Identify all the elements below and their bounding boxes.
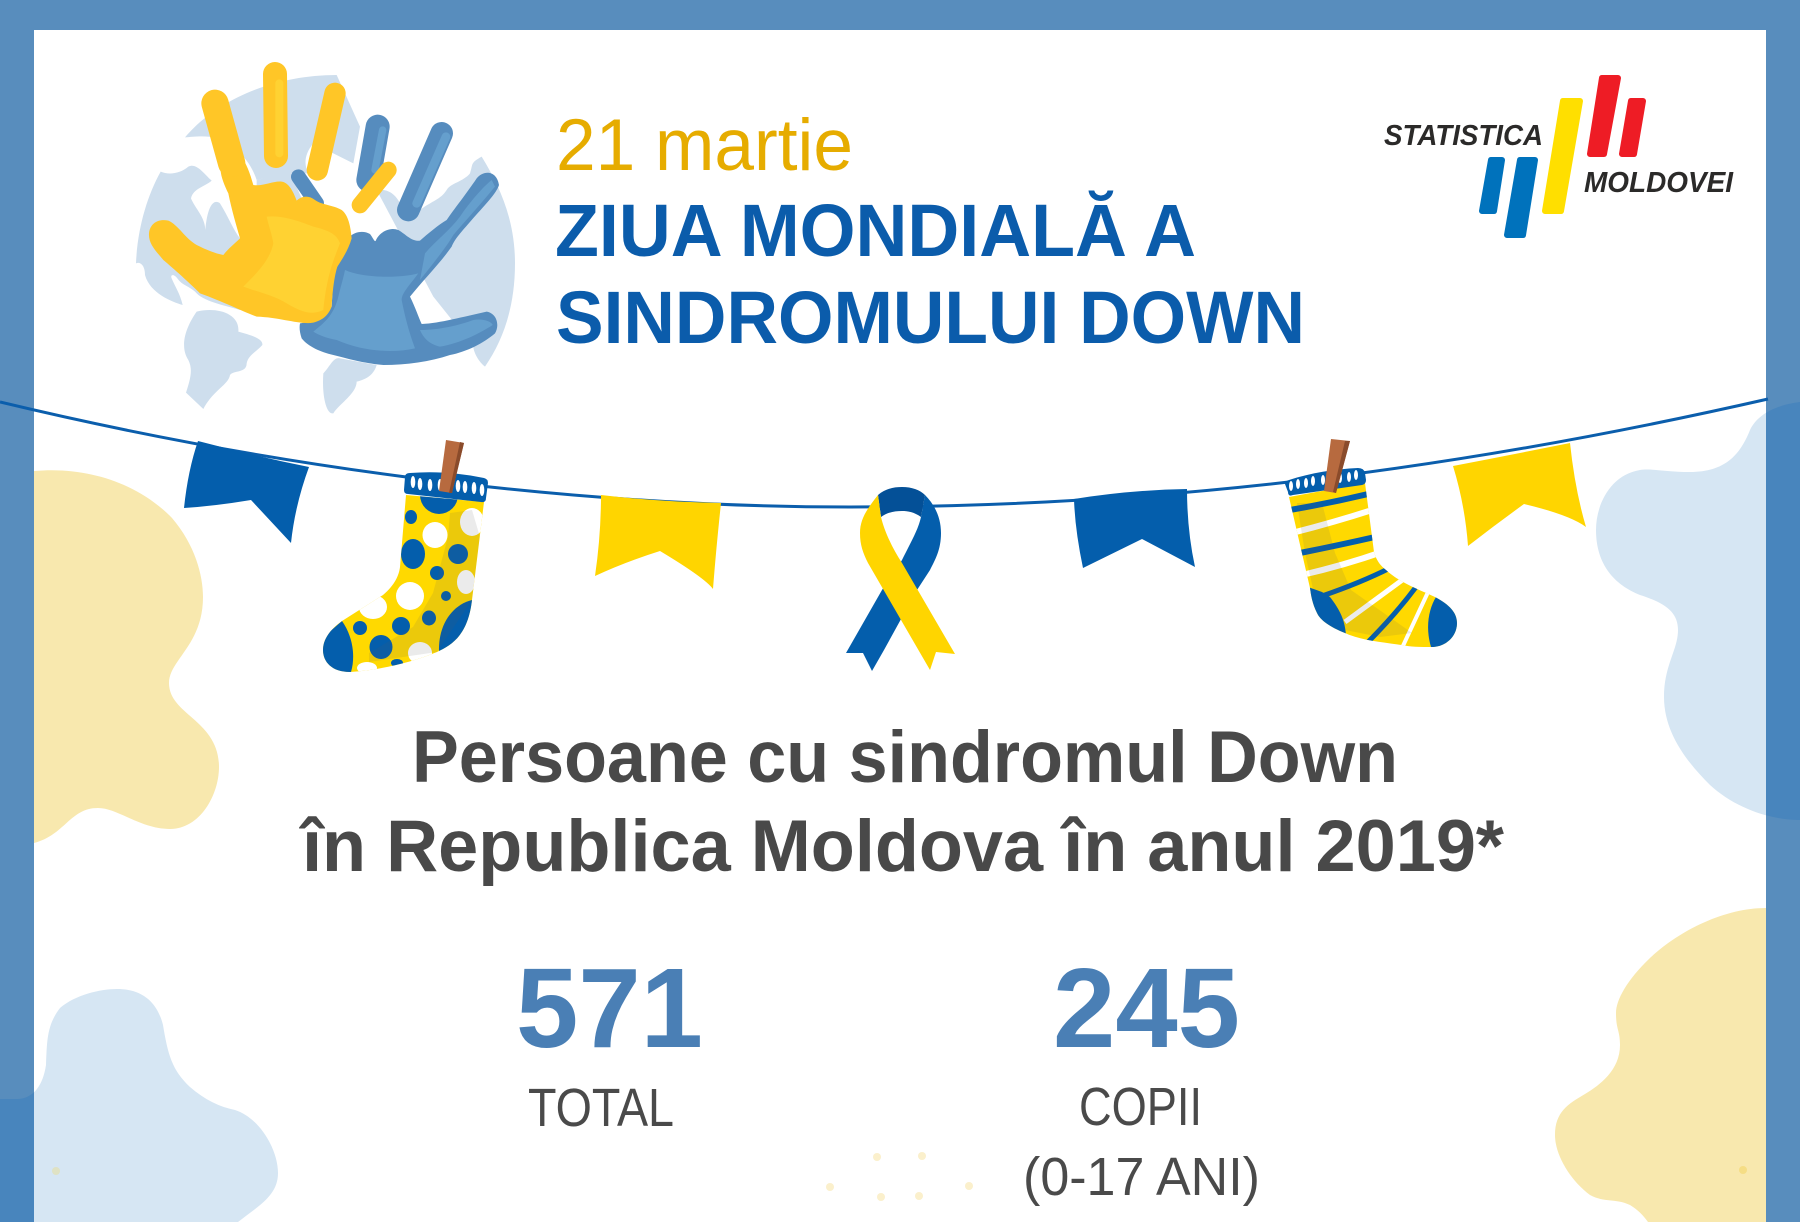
clothes peg xyxy=(439,440,464,493)
bunting flag: yellow left xyxy=(595,495,721,589)
statistic: children xyxy=(1023,945,1260,1207)
bunting flag: yellow right xyxy=(1453,443,1586,546)
bunting flag: blue right xyxy=(1074,489,1195,568)
decorative blobs xyxy=(0,402,1800,1222)
clothesline rope xyxy=(0,399,1768,507)
icon: awareness ribbon xyxy=(846,487,955,671)
logo: Statistica Moldovei xyxy=(1384,78,1734,235)
bunting flag: blue left xyxy=(184,441,309,543)
statistic: total xyxy=(516,945,703,1138)
main title: ZIUA MONDIALĂ A xyxy=(555,189,1196,272)
blue hand xyxy=(298,127,499,365)
yellow hand xyxy=(149,74,388,323)
date heading: 21 martie xyxy=(556,105,853,186)
main title xyxy=(555,189,1305,359)
globe land masses xyxy=(136,75,515,413)
statistic: children: (0-17 ANI) xyxy=(1023,1147,1260,1207)
logo: Statistica Moldovei: MOLDOVEI xyxy=(1584,167,1734,199)
icon: globe with yellow and blue hand prints xyxy=(136,74,515,413)
statistic: total: TOTAL xyxy=(528,1078,674,1138)
statistic: children: 245 xyxy=(1053,945,1240,1071)
section heading: în Republica Moldova în anul 2019* xyxy=(299,806,1505,887)
main title: SINDROMULUI DOWN xyxy=(556,276,1305,359)
logo: Statistica Moldovei: STATISTICA xyxy=(1384,120,1543,152)
icon: striped sock xyxy=(1285,439,1465,650)
clothes peg xyxy=(1324,439,1350,493)
confetti dots xyxy=(52,1152,1747,1201)
icon: polka dot sock xyxy=(320,440,488,674)
section heading xyxy=(299,717,1505,887)
statistic: children: COPII xyxy=(1079,1077,1202,1137)
section heading: Persoane cu sindromul Down xyxy=(412,717,1398,798)
statistic: total: 571 xyxy=(516,945,703,1071)
